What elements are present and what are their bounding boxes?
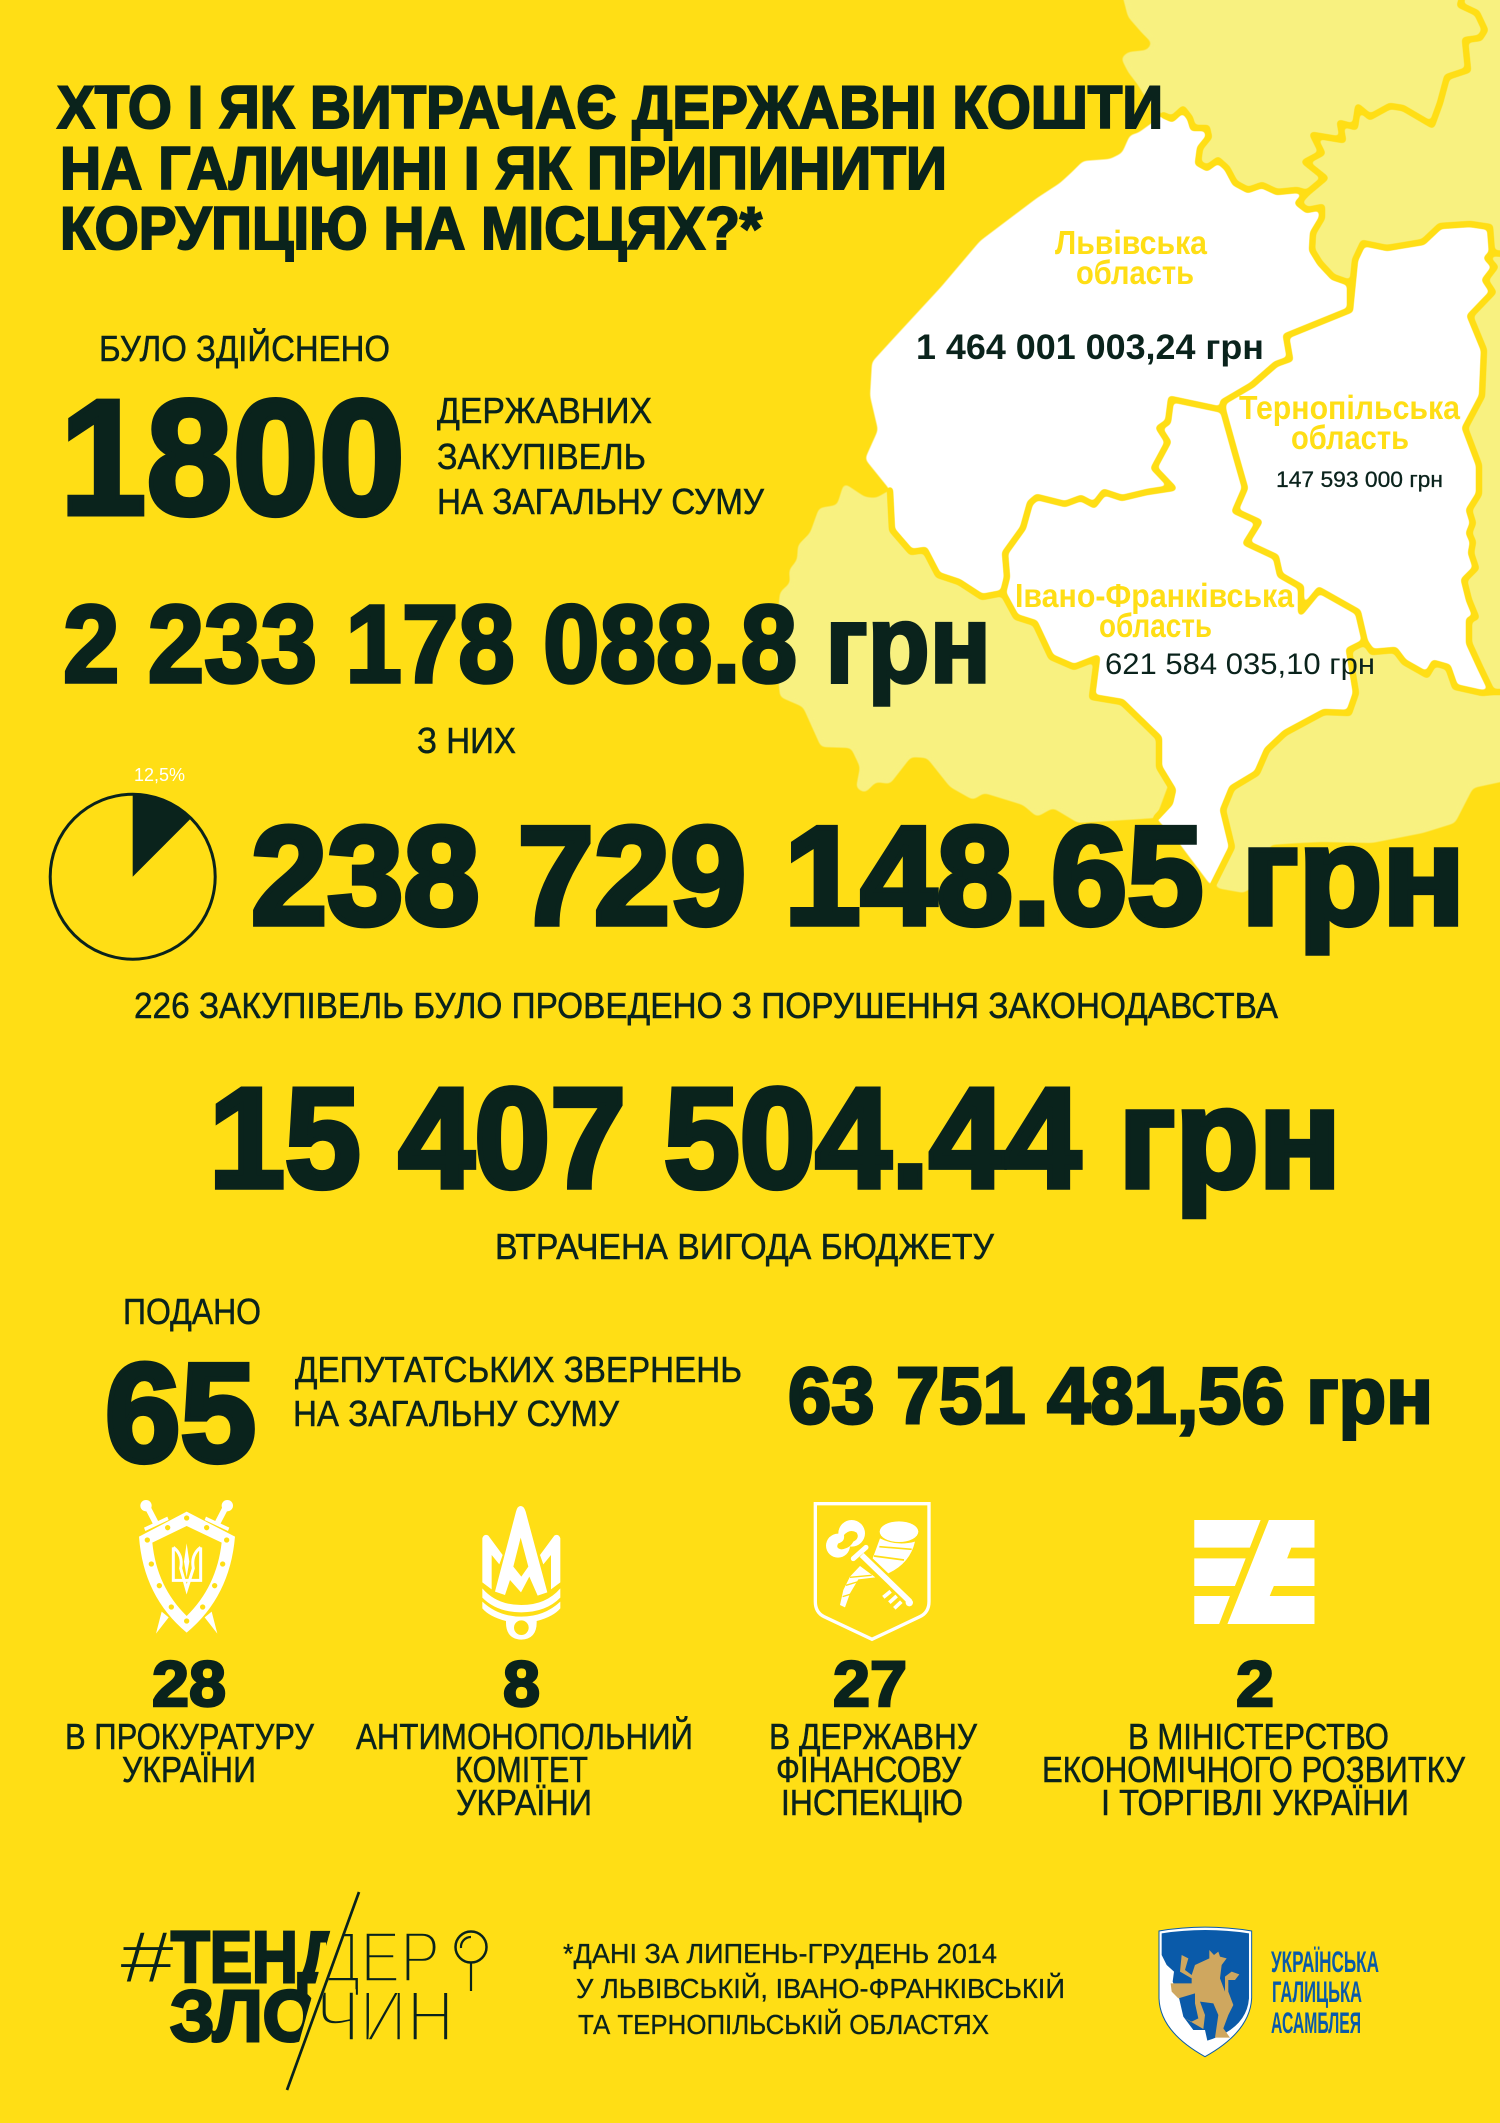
logo: tender crime hashtag: ЗЛО xyxy=(170,1977,318,2057)
label: Lviv oblast: область xyxy=(1076,254,1194,291)
white area of the three oblasts xyxy=(865,109,1495,887)
stat: total sum: 2 233 178 088.8 грн xyxy=(63,583,991,706)
title xyxy=(57,74,1163,262)
stat: antimonopoly 8: 8 xyxy=(503,1648,540,1720)
stat: antimonopoly 8: АНТИМОНОПОЛЬНИЙ xyxy=(356,1715,693,1757)
stat: 1800 procurements: ЗАКУПІВЕЛЬ xyxy=(437,436,646,477)
stat: prosecutor 28: В ПРОКУРАТУРУ xyxy=(65,1716,315,1757)
stat: 65 deputy appeals xyxy=(105,1291,1433,1491)
stat: ministry 2 xyxy=(1042,1648,1466,1823)
stat: prosecutor 28: УКРАЇНИ xyxy=(122,1749,256,1790)
logo: tender crime hashtag: ЧИН xyxy=(316,1977,454,2057)
neighbouring regions east and north xyxy=(1121,0,1500,893)
pie chart 12.5%: 12,5% xyxy=(134,765,185,785)
stat: antimonopoly 8 xyxy=(356,1648,693,1823)
label: Ivano-Frankivsk oblast: Івано-Франківська xyxy=(1015,577,1295,614)
label: Ivano-Frankivsk oblast: область xyxy=(1099,607,1212,644)
stat: finance inspection 27: ФІНАНСОВУ xyxy=(776,1749,962,1790)
stat: finance inspection 27: В ДЕРЖАВНУ xyxy=(769,1716,978,1757)
stat: finance inspection 27 xyxy=(769,1648,978,1823)
footnote: ТА ТЕРНОПІЛЬСЬКІЙ ОБЛАСТЯХ xyxy=(578,2009,989,2040)
icon: key and horn shield xyxy=(815,1504,929,1639)
label: Ivano-Frankivsk oblast xyxy=(1015,577,1375,681)
caption: of them: З НИХ xyxy=(417,720,516,761)
caption: lost budget benefit: ВТРАЧЕНА ВИГОДА БЮДЖЕТУ xyxy=(495,1226,995,1267)
footnote xyxy=(563,1938,1065,2040)
stat: prosecutor 28 xyxy=(65,1648,315,1790)
title: НА ГАЛИЧИНІ І ЯК ПРИПИНИТИ xyxy=(60,135,947,202)
logo: tender crime hashtag: ДЕР xyxy=(320,1918,440,1998)
label: Ternopil oblast: Тернопільська xyxy=(1239,389,1461,426)
icon: shield with lion xyxy=(1159,1927,1252,2057)
stat: 1800 procurements xyxy=(60,327,765,549)
caption: 226 procurements with violations: 226 ЗАКУПІВЕЛЬ БУЛО ПРОВЕДЕНО З ПОРУШЕННЯ ЗАКОНОДАВСТВА xyxy=(134,985,1278,1026)
stat: prosecutor 28: 28 xyxy=(152,1648,226,1720)
title: КОРУПЦІЮ НА МІСЦЯХ?* xyxy=(60,195,763,262)
logo: tender crime hashtag xyxy=(120,1892,486,2090)
stat: 65 deputy appeals: ДЕПУТАТСЬКИХ ЗВЕРНЕНЬ xyxy=(295,1349,742,1390)
icon: antimonopoly crown xyxy=(482,1506,560,1640)
stat: violating sum: 238 729 148.65 грн xyxy=(251,797,1465,954)
footnote: У ЛЬВІВСЬКІЙ, ІВАНО-ФРАНКІВСЬКІЙ xyxy=(576,1973,1065,2004)
stat: 65 deputy appeals: 65 xyxy=(105,1334,256,1491)
stat: ministry 2: І ТОРГІВЛІ УКРАЇНИ xyxy=(1101,1782,1409,1823)
oblast borders xyxy=(890,0,1500,887)
logo: Ukrainian Galician Assembly xyxy=(1159,1927,1379,2057)
label: Lviv oblast: 1 464 001 003,24 грн xyxy=(916,328,1264,367)
stat: antimonopoly 8: УКРАЇНИ xyxy=(456,1782,592,1823)
stat: 1800 procurements: НА ЗАГАЛЬНУ СУМУ xyxy=(437,481,765,522)
label: Ivano-Frankivsk oblast: 621 584 035,10 грн xyxy=(1105,648,1375,681)
logo: tender crime hashtag: # xyxy=(120,1918,174,1998)
label: Lviv oblast: Львівська xyxy=(1055,224,1208,261)
logo: Ukrainian Galician Assembly: УКРАЇНСЬКА xyxy=(1271,1946,1379,1979)
icon: prosecutor shield xyxy=(139,1500,235,1634)
logo: Ukrainian Galician Assembly: АСАМБЛЕЯ xyxy=(1271,2007,1361,2040)
label: Ternopil oblast xyxy=(1239,389,1461,492)
pie chart 12.5% xyxy=(50,765,215,959)
stat: finance inspection 27: 27 xyxy=(833,1648,907,1720)
stat: 1800 procurements: БУЛО ЗДІЙСНЕНО xyxy=(99,327,390,369)
footnote: *ДАНІ ЗА ЛИПЕНЬ-ГРУДЕНЬ 2014 xyxy=(563,1938,997,1969)
stat: antimonopoly 8: КОМІТЕТ xyxy=(455,1749,588,1790)
stat: 1800 procurements: ДЕРЖАВНИХ xyxy=(437,390,652,431)
neighbouring region south-west xyxy=(775,483,1200,823)
stat: 1800 procurements: 1800 xyxy=(60,366,405,549)
stat: lost budget benefit: 15 407 504.44 грн xyxy=(209,1059,1341,1218)
stat: ministry 2: В МІНІСТЕРСТВО xyxy=(1128,1716,1389,1757)
map of Halychyna regions xyxy=(775,0,1500,893)
label: Ternopil oblast: область xyxy=(1291,419,1409,456)
stat: 65 deputy appeals: НА ЗАГАЛЬНУ СУМУ xyxy=(293,1393,620,1434)
stat: ministry 2: 2 xyxy=(1236,1648,1274,1720)
label: Ternopil oblast: 147 593 000 грн xyxy=(1276,467,1443,492)
stat: finance inspection 27: ІНСПЕКЦІЮ xyxy=(781,1782,963,1823)
logo: Ukrainian Galician Assembly: ГАЛИЦЬКА xyxy=(1272,1976,1362,2009)
stat: 65 deputy appeals: 63 751 481,56 грн xyxy=(788,1351,1433,1440)
label: Lviv oblast xyxy=(916,224,1264,367)
logo: tender crime hashtag: ТЕНД xyxy=(171,1918,343,1998)
icon: stylised E ministry logo xyxy=(1194,1520,1314,1624)
stat: 65 deputy appeals: ПОДАНО xyxy=(123,1291,261,1332)
title: ХТО І ЯК ВИТРАЧАЄ ДЕРЖАВНІ КОШТИ xyxy=(57,74,1163,141)
